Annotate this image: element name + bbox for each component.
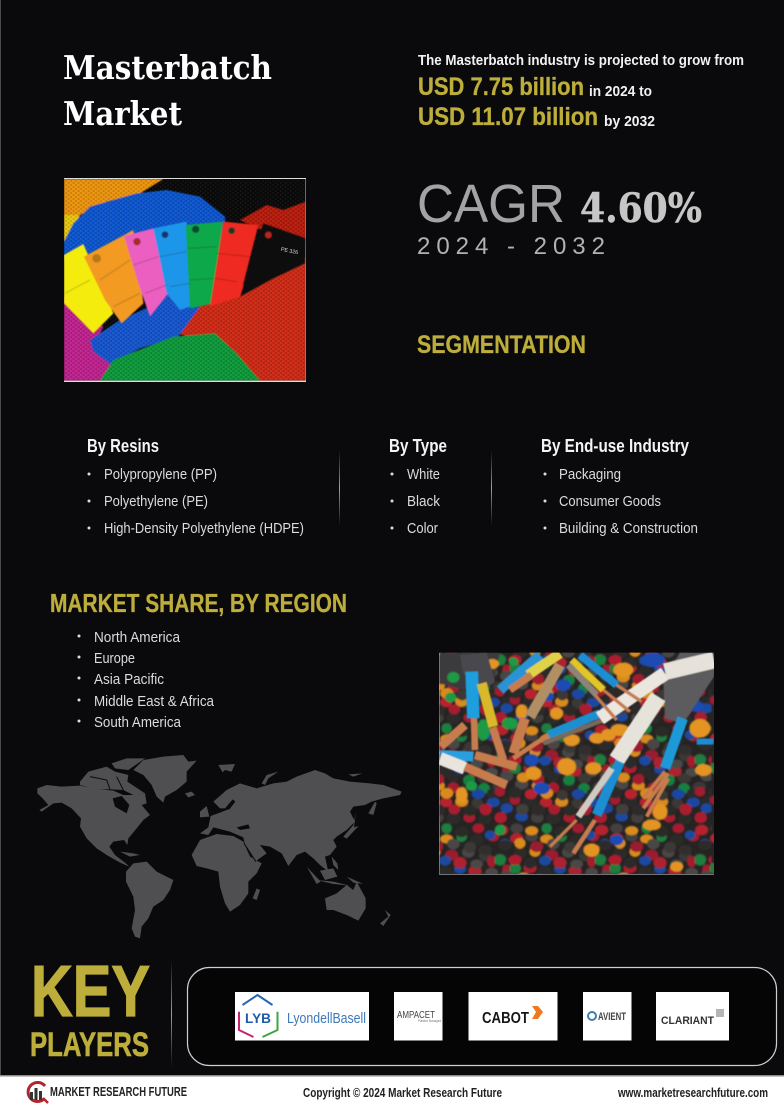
footer: [0, 1075, 784, 1108]
key players panel: [188, 968, 776, 1066]
logo: Ampacet: Plastics Managed: [418, 1019, 441, 1023]
segment column: by resins: By Resins: [87, 436, 159, 456]
segment column: by end-use industry: Building & Construction: [559, 521, 698, 537]
photo: copper wires over mixed pellets: [439, 652, 714, 874]
CAGR figure: [417, 174, 702, 260]
market growth forecast: USD 11.07 billion: [418, 103, 598, 131]
logo: LyondellBasell: LYB: [245, 1010, 271, 1026]
key players heading: [30, 952, 150, 1064]
segment column: by type: Black: [407, 494, 441, 510]
market growth forecast: USD 7.75 billion: [418, 73, 584, 101]
title: [63, 48, 272, 133]
segment column: by end-use industry: By End-use Industry: [541, 436, 689, 456]
logo: Ampacet: [394, 992, 442, 1040]
title: Masterbatch: [63, 48, 272, 87]
logo: LyondellBasell: [235, 992, 369, 1040]
market growth forecast: by 2032: [604, 114, 655, 130]
region list: Middle East & Africa: [94, 694, 215, 710]
logo: Clariant: CLARIANT: [661, 1015, 714, 1027]
segment column: by resins: High-Density Polyethylene (HDPE): [104, 521, 304, 537]
footer logo icon: [28, 1082, 48, 1103]
market growth forecast: [418, 52, 744, 131]
segment column: by resins: [87, 436, 304, 537]
key players heading: PLAYERS: [30, 1026, 149, 1064]
market growth forecast: The Masterbatch industry is projected to grow from: [418, 52, 744, 69]
region list: Asia Pacific: [94, 672, 164, 688]
segmentation heading: SEGMENTATION: [417, 331, 586, 359]
world map: [37, 755, 402, 938]
footer: MARKET RESEARCH FUTURE: [50, 1085, 187, 1099]
logo: Cabot: [468, 992, 558, 1040]
segment column: by type: [389, 436, 447, 537]
CAGR figure: CAGR: [417, 174, 565, 234]
title: Market: [63, 94, 183, 133]
logo: Avient: AVIENT: [598, 1011, 626, 1023]
market growth forecast: in 2024 to: [589, 84, 652, 100]
photo: masterbatch pellets and colour sample cards: PE 326: [280, 247, 299, 256]
segment column: by end-use industry: [541, 436, 698, 537]
key players heading: KEY: [31, 952, 150, 1032]
region list: Europe: [94, 651, 135, 667]
segment column: by end-use industry: Consumer Goods: [559, 494, 661, 510]
CAGR figure: 2024 - 2032: [417, 233, 605, 260]
market share heading: MARKET SHARE, BY REGION: [50, 588, 347, 618]
segment column: by end-use industry: Packaging: [559, 467, 621, 483]
CAGR figure: 4.60%: [580, 185, 702, 232]
region list: [78, 630, 215, 731]
region list: North America: [94, 630, 181, 646]
logo: Avient: [583, 992, 632, 1040]
segment column: by type: By Type: [389, 436, 447, 456]
logo: Ampacet: AMPACET: [397, 1010, 435, 1021]
region list: South America: [94, 715, 182, 731]
logo: Clariant: [656, 992, 729, 1040]
logo: LyondellBasell: LyondellBasell: [287, 1011, 366, 1027]
footer: Copyright © 2024 Market Research Future: [303, 1086, 502, 1100]
segment column: by resins: Polyethylene (PE): [104, 494, 208, 510]
logo: Cabot: CABOT: [482, 1010, 529, 1027]
segment column: by type: Color: [407, 521, 438, 537]
photo: masterbatch pellets and colour sample cards: [64, 178, 306, 382]
segment column: by type: White: [407, 467, 440, 483]
segment column: by resins: Polypropylene (PP): [104, 467, 217, 483]
